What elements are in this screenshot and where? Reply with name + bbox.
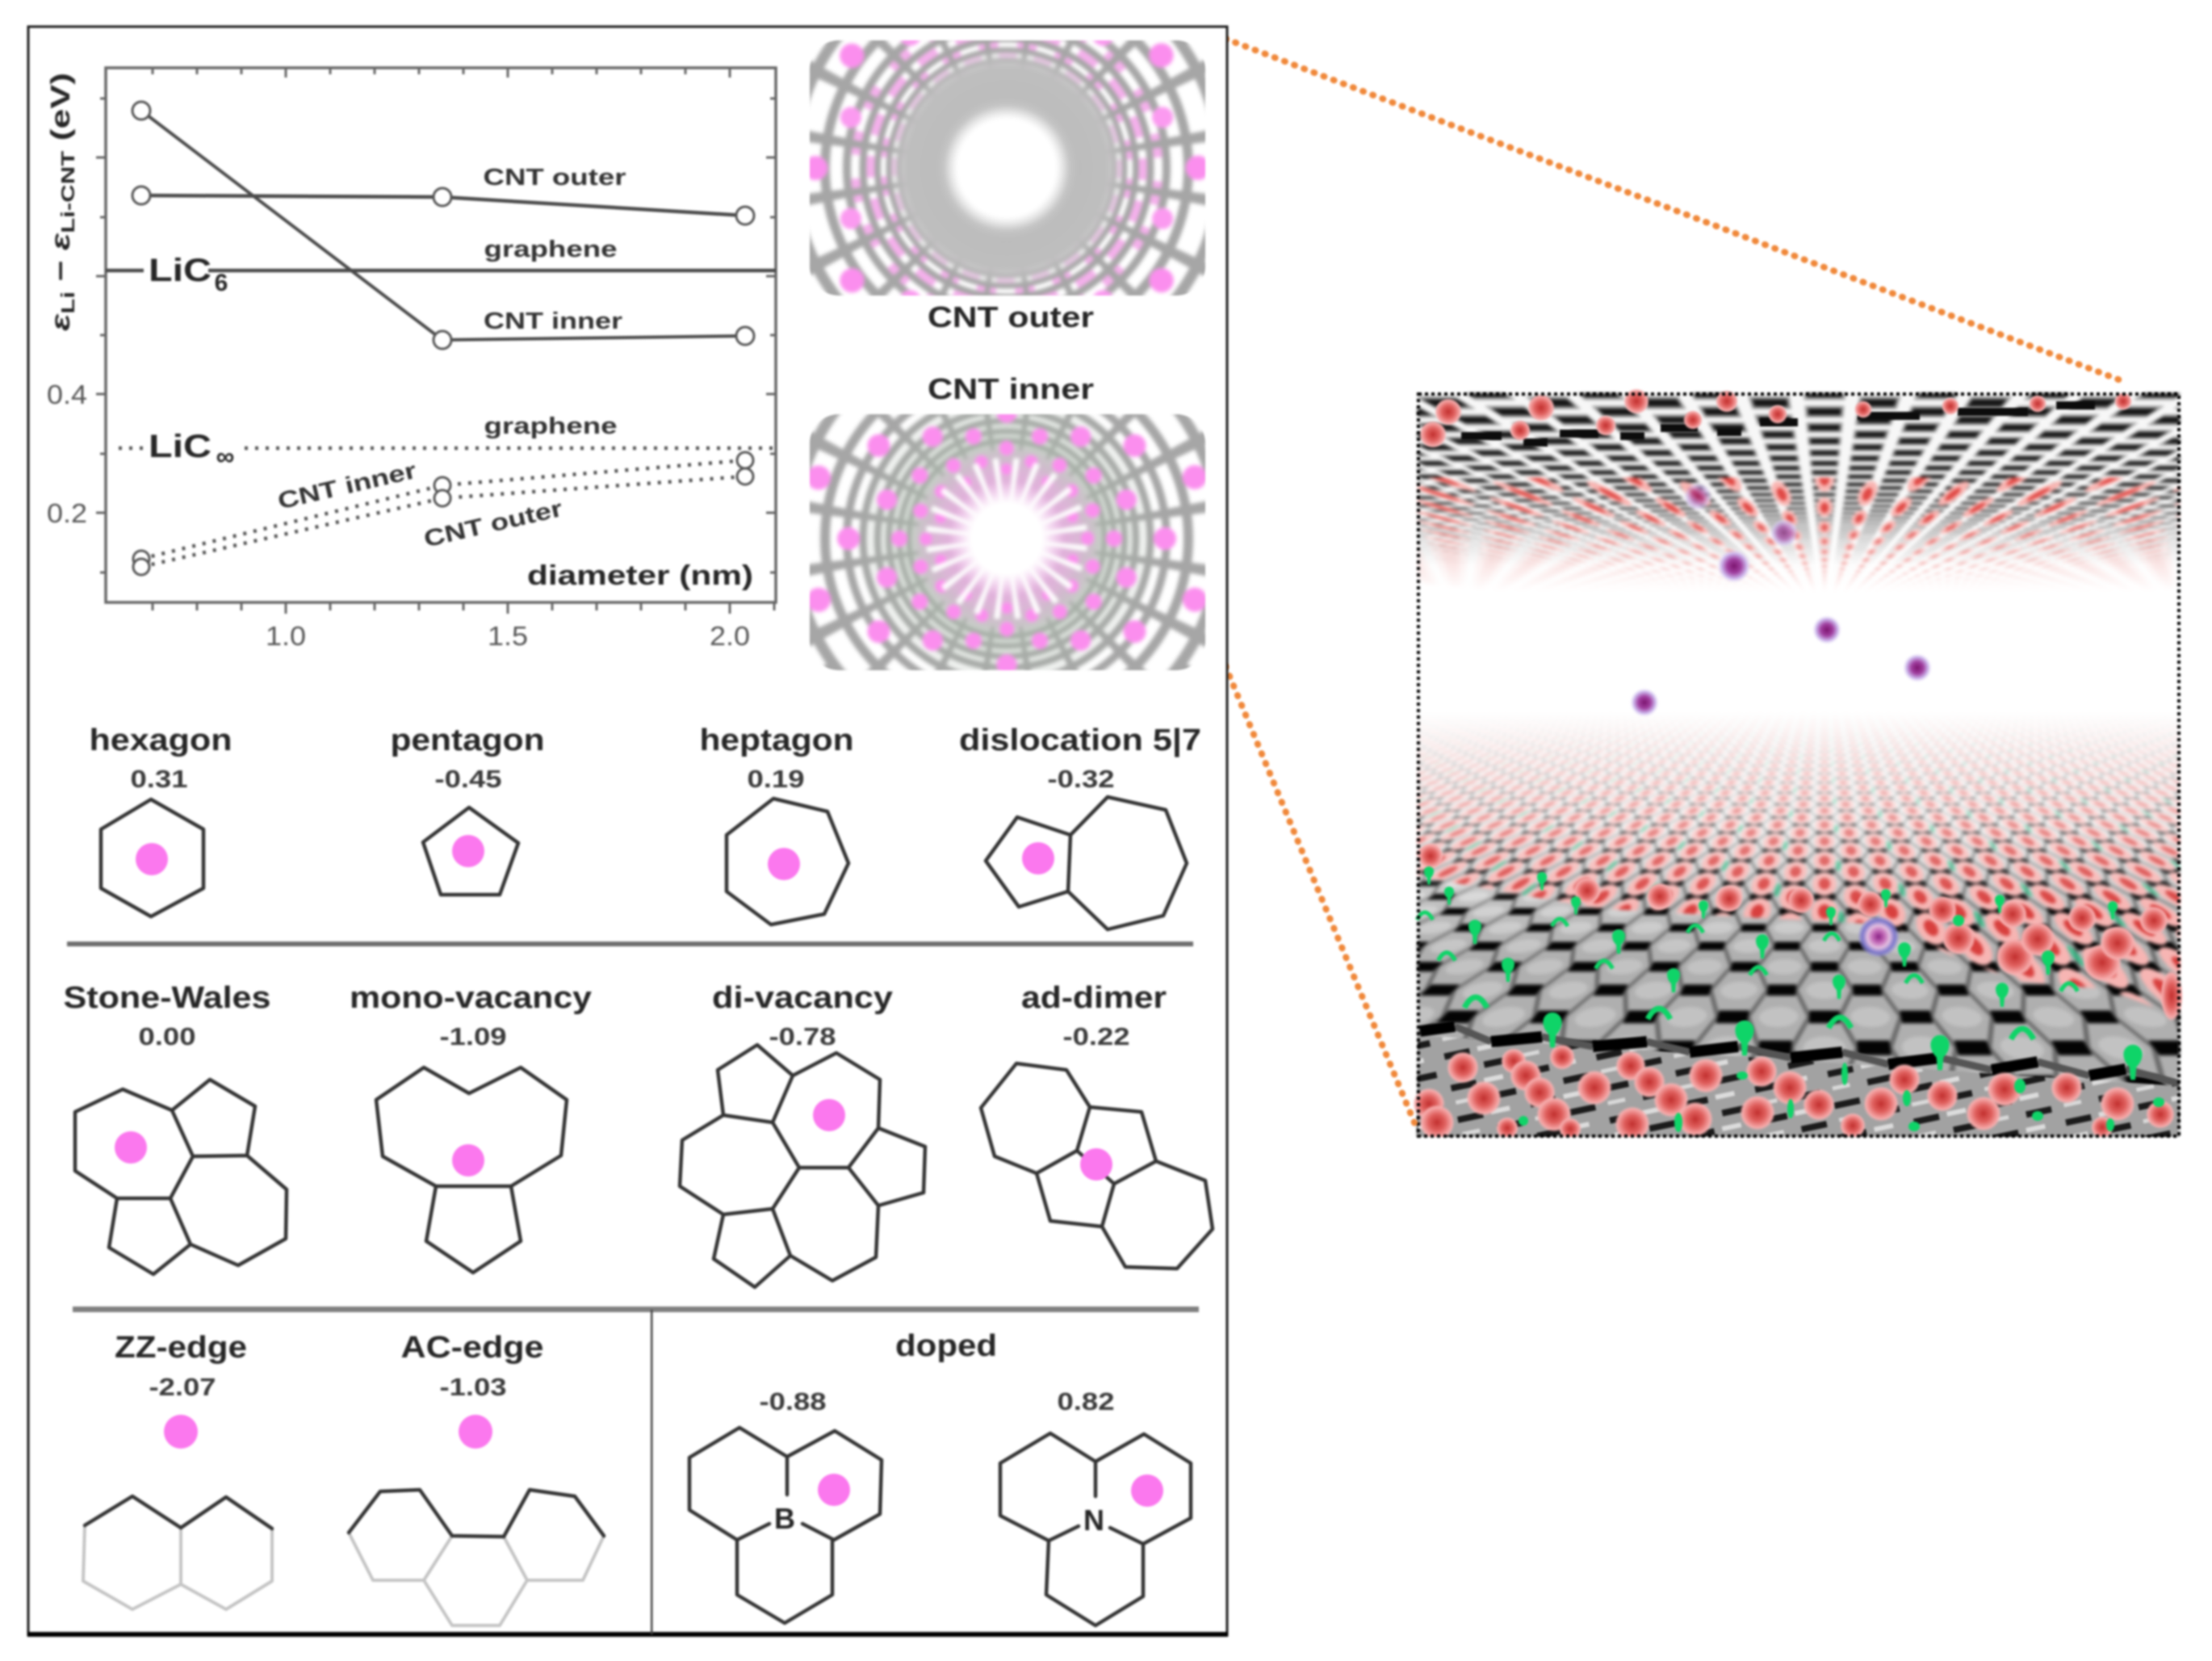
label: LiC6: 6 bbox=[215, 270, 228, 296]
nanotube view: CNT outer bbox=[808, 39, 1207, 297]
row 1: dislocation 5|7: -0.32 bbox=[1048, 765, 1114, 793]
solid series: CNT outer bbox=[132, 187, 754, 224]
lower graphene sheet in perspective bbox=[1414, 725, 2183, 1137]
y axis tick labels: 0.4 bbox=[47, 380, 87, 409]
dotted series: CNT outer bbox=[133, 468, 753, 575]
lithium atoms between the sheets bbox=[1630, 482, 1932, 957]
row 1: heptagon bbox=[699, 724, 854, 925]
dotted series: CNT inner bbox=[133, 452, 753, 567]
divider 2 bbox=[73, 1307, 1199, 1312]
y axis title: − bbox=[45, 250, 75, 292]
lattice illustration: Li between graphene sheets bbox=[1418, 393, 2180, 1137]
series label: graphene dotted: graphene bbox=[484, 413, 617, 439]
tube lattice bbox=[809, 413, 1206, 672]
y axis tick labels: 0.2 bbox=[47, 498, 87, 528]
x axis tick labels bbox=[266, 621, 750, 651]
row 3: boron doped bbox=[689, 1387, 882, 1623]
series label: CNT inner: CNT inner bbox=[484, 308, 622, 334]
tube lattice bbox=[809, 39, 1206, 297]
white mask below the lattice bbox=[1405, 1137, 2196, 1161]
red atoms on the near strip bbox=[1413, 1044, 2175, 1142]
series label: CNT inner rotated: CNT inner bbox=[275, 458, 419, 515]
y axis title: Li-CNT bbox=[57, 151, 78, 233]
row 3: ZZ-edge bbox=[83, 1331, 272, 1609]
x axis tick labels: 1.0 bbox=[266, 621, 306, 651]
row 2: mono-vacancy: -1.09 bbox=[439, 1022, 507, 1051]
label: LiC6: LiC bbox=[149, 253, 212, 288]
y axis title: ε bbox=[45, 312, 75, 331]
row 2: di-vacancy: -0.78 bbox=[769, 1022, 836, 1051]
near lattice strip bbox=[1418, 1035, 2180, 1137]
row 1: dislocation 5|7 bbox=[959, 724, 1201, 929]
upper graphene sheet in perspective bbox=[1414, 391, 2183, 584]
chart axes frame bbox=[96, 68, 776, 614]
y axis title: (eV) bbox=[45, 73, 75, 151]
dotted series: graphene LiC-infinity bbox=[119, 447, 776, 450]
caption: CNT outer: CNT outer bbox=[928, 300, 1094, 333]
row 2: Stone-Wales: 0.00 bbox=[139, 1022, 195, 1051]
divider 1 bbox=[67, 942, 1193, 946]
pink glow and rays near tube centre bbox=[918, 450, 1096, 627]
dotted image frame bbox=[1418, 394, 2179, 1136]
row 1: heptagon: heptagon bbox=[699, 724, 854, 757]
row 1: hexagon: hexagon bbox=[89, 724, 233, 757]
row 1: pentagon: pentagon bbox=[391, 724, 544, 757]
panel bottom edge bbox=[27, 1632, 1228, 1637]
panel frame bbox=[28, 27, 1227, 1635]
row 1: dislocation 5|7: dislocation 5|7 bbox=[959, 724, 1201, 757]
row 3: doped heading: doped bbox=[895, 1329, 997, 1363]
axis label: diameter: diameter (nm) bbox=[527, 560, 753, 591]
label: LiC-infinity: LiC bbox=[149, 429, 212, 464]
vertical divider bbox=[651, 1310, 652, 1634]
row 2: ad-dimer bbox=[981, 981, 1213, 1269]
dark first rows of upper sheet bbox=[1461, 405, 2095, 443]
x axis tick labels: 1.5 bbox=[488, 621, 528, 651]
row 3: nitrogen doped bbox=[1000, 1387, 1191, 1625]
row 3: AC-edge: -1.03 bbox=[439, 1373, 507, 1401]
row 3: AC-edge bbox=[349, 1331, 604, 1625]
label: LiC-infinity: ∞ bbox=[216, 442, 234, 471]
row 3: nitrogen doped: 0.82 bbox=[1058, 1387, 1114, 1416]
caption: CNT inner: CNT inner bbox=[928, 372, 1094, 405]
large red atoms bbox=[1418, 843, 2183, 1021]
solid series: graphene LiC6 bbox=[106, 269, 776, 272]
pink stripes inside tube cells bbox=[849, 39, 1164, 297]
row 2: di-vacancy bbox=[680, 981, 925, 1287]
row 1: hexagon bbox=[89, 724, 233, 916]
x axis tick labels: 2.0 bbox=[710, 621, 750, 651]
y axis title: Li bbox=[57, 292, 78, 314]
series label: graphene: graphene bbox=[484, 237, 617, 262]
fade of the lower sheet toward the horizon bbox=[1418, 664, 2180, 987]
series label: CNT outer rotated: CNT outer bbox=[421, 496, 565, 553]
orange connector: top bbox=[1225, 39, 2125, 382]
row 1: heptagon: 0.19 bbox=[748, 765, 804, 793]
y axis title: ε bbox=[45, 232, 75, 250]
label: LiC-infinity bbox=[144, 429, 239, 471]
near hexagon edges bbox=[1420, 1026, 2180, 1084]
chart: adsorption energy versus diameter bbox=[45, 68, 776, 651]
row 2: mono-vacancy: mono-vacancy bbox=[350, 981, 592, 1015]
pink Li sites inner tube bbox=[808, 413, 1206, 672]
row 3: ZZ-edge: -2.07 bbox=[149, 1373, 216, 1401]
y axis tick labels bbox=[47, 380, 87, 528]
row 1: pentagon: -0.45 bbox=[434, 765, 502, 793]
green bonds bbox=[1417, 866, 2164, 1132]
label: LiC6 bbox=[144, 252, 228, 296]
pink Li sites outer tube bbox=[808, 39, 1207, 297]
row 3: boron doped: -0.88 bbox=[759, 1387, 827, 1416]
orange connector: bottom bbox=[1225, 666, 1418, 1130]
row 3: AC-edge: AC-edge bbox=[400, 1331, 544, 1365]
solid series: CNT inner bbox=[132, 102, 754, 349]
red atoms near top of upper sheet bbox=[1419, 388, 2132, 448]
lattice foreground details, dotted frame and Li atoms bbox=[1227, 36, 2183, 1140]
nanotube view: CNT inner bbox=[808, 413, 1207, 672]
row 3: boron doped: B bbox=[774, 1502, 795, 1535]
row 3: ZZ-edge: ZZ-edge bbox=[115, 1331, 247, 1365]
row 2: Stone-Wales: Stone-Wales bbox=[63, 981, 271, 1015]
row 2: mono-vacancy bbox=[350, 981, 592, 1273]
row 1: pentagon bbox=[391, 724, 544, 895]
series label: CNT outer: CNT outer bbox=[483, 165, 626, 191]
left panel bbox=[26, 24, 1230, 1638]
row 2: ad-dimer: ad-dimer bbox=[1021, 981, 1167, 1015]
row 1: hexagon: 0.31 bbox=[131, 765, 187, 793]
row 3: nitrogen doped: N bbox=[1083, 1504, 1104, 1537]
row 2: ad-dimer: -0.22 bbox=[1062, 1022, 1130, 1051]
row 2: Stone-Wales bbox=[63, 981, 287, 1274]
row 2: di-vacancy: di-vacancy bbox=[712, 981, 893, 1015]
